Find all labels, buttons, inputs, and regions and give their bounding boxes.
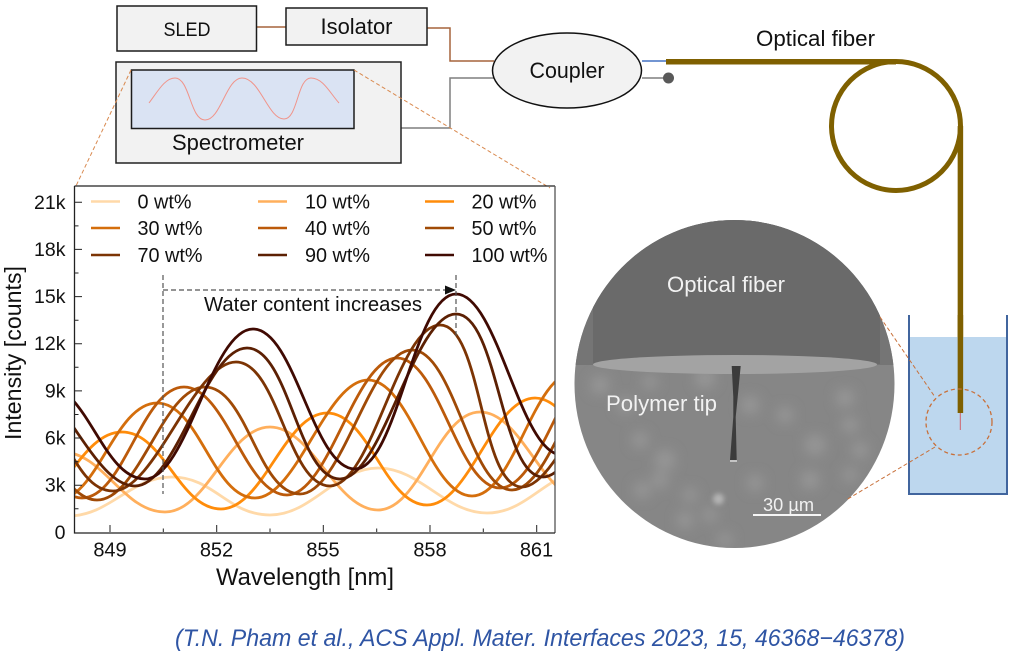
y axis tick labels: 18k	[34, 239, 66, 261]
legend: 50 wt%	[472, 218, 537, 240]
legend	[91, 192, 548, 267]
label: optical fiber in micrograph: Optical fiber	[667, 272, 785, 297]
polymer tip in water	[959, 413, 961, 430]
y axis tick labels	[34, 192, 66, 544]
annotation: water content increases arrow: Water content increases	[204, 294, 422, 316]
optical fiber with loop	[666, 62, 960, 413]
x axis title: Wavelength [nm]	[216, 564, 394, 591]
spectra curves	[75, 292, 554, 517]
legend: 30 wt%	[138, 218, 203, 240]
connection: coupler terminated end	[642, 72, 674, 84]
legend: 90 wt%	[305, 245, 370, 267]
x axis tick labels: 858	[413, 540, 447, 562]
legend: 100 wt%	[472, 245, 548, 267]
annotation: water content increases arrow	[163, 275, 456, 494]
coupler: Coupler	[530, 58, 604, 83]
legend: 0 wt%	[138, 192, 192, 214]
x axis tick labels	[93, 540, 553, 562]
axes frame and ticks	[74, 186, 555, 533]
x axis tick labels: 855	[306, 540, 340, 562]
box: SLED: SLED	[164, 19, 210, 41]
box: isolator: Isolator	[320, 14, 392, 39]
fiber segment drawn over water	[958, 315, 963, 413]
box: SLED	[117, 6, 256, 51]
zoom guide lines from spectrometer to chart	[76, 70, 550, 188]
connection: coupler to fiber	[642, 60, 667, 62]
legend: 20 wt%	[472, 192, 537, 214]
connection: spectrometer to coupler	[401, 78, 494, 128]
y axis tick labels: 15k	[34, 286, 66, 308]
y axis tick labels: 12k	[34, 333, 66, 355]
legend: 70 wt%	[138, 245, 203, 267]
label: optical fiber: Optical fiber	[756, 26, 875, 51]
panel: optical setup schematic	[116, 6, 674, 163]
label: polymer tip: Polymer tip	[606, 391, 717, 416]
y axis tick labels: 0	[55, 522, 66, 544]
scale bar: 30 µm	[763, 494, 814, 515]
coupler	[492, 33, 642, 108]
box: spectrometer: Spectrometer	[172, 130, 304, 155]
panel: SEM micrograph of polymer tip	[570, 215, 900, 555]
box: isolator	[286, 8, 427, 45]
y axis tick labels: 6k	[45, 428, 66, 450]
y axis tick labels: 3k	[45, 474, 66, 496]
beaker with water	[909, 315, 1007, 494]
dashed magnifier circle	[926, 389, 992, 455]
x axis tick labels: 852	[200, 540, 233, 562]
x axis tick labels: 861	[520, 540, 553, 562]
y axis tick labels: 9k	[45, 380, 66, 402]
zoom guide lines from beaker to micrograph	[846, 317, 935, 500]
legend: 40 wt%	[305, 218, 370, 240]
legend: 10 wt%	[305, 192, 370, 214]
y axis tick labels: 21k	[34, 192, 66, 214]
panel: intensity chart	[4, 185, 556, 590]
y axis title: Intensity [counts]	[0, 266, 26, 440]
box: spectrometer	[116, 62, 401, 163]
connection: SLED to isolator to coupler	[257, 27, 494, 61]
citation: (T.N. Pham et al., ACS Appl. Mater. Interfaces 2023, 15, 46368−46378)	[175, 625, 905, 652]
x axis tick labels: 849	[93, 540, 127, 562]
